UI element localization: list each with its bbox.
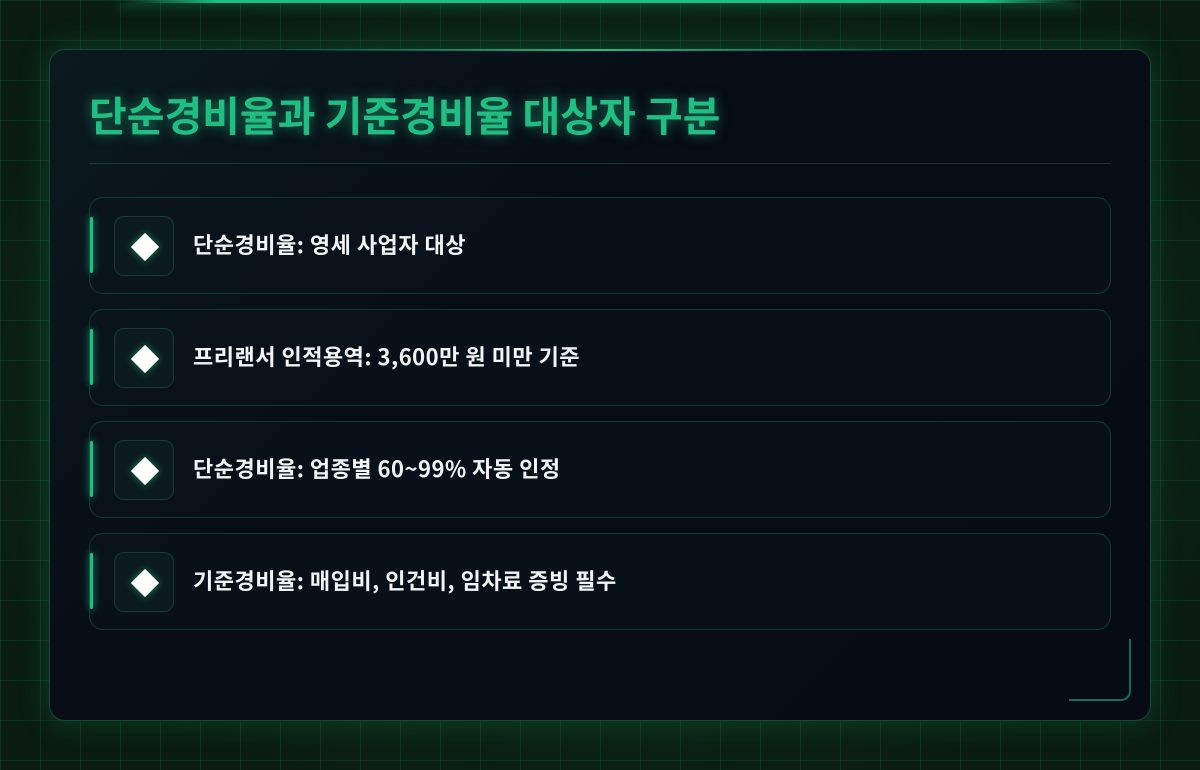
item 3 (89, 421, 1111, 518)
item 4 (89, 533, 1111, 630)
item 3: 단순경비율: 업종별 60~99% 자동 인정 (193, 452, 561, 484)
item 4: 기준경비율: 매입비, 인건비, 임차료 증빙 필수 (193, 564, 617, 596)
item 1 (89, 197, 1111, 294)
title: 단순경비율과 기준경비율 대상자 구분 (89, 83, 720, 143)
item 2 (89, 309, 1111, 406)
item 2: 프리랜서 인적용역: 3,600만 원 미만 기준 (193, 340, 580, 372)
item 1: 단순경비율: 영세 사업자 대상 (193, 228, 466, 260)
